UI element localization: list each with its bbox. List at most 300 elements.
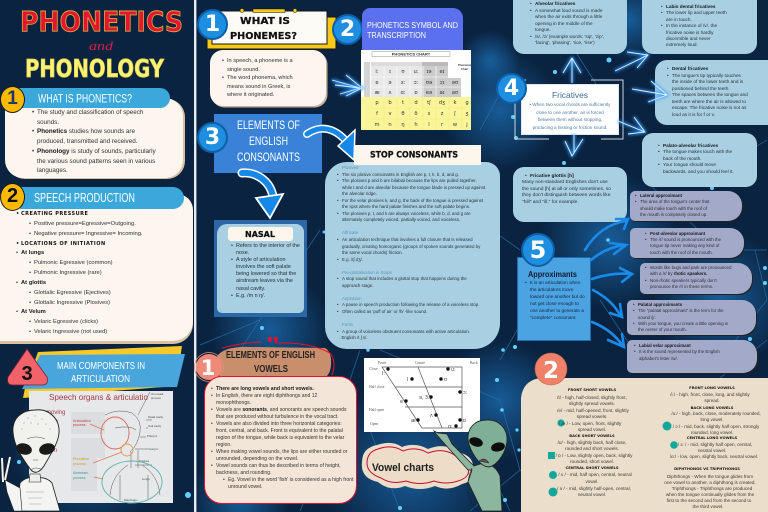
text: stop consonants details: the alveolar ridge. xyxy=(342,191,377,196)
icon: blue circle number 2: 2 xyxy=(340,17,355,42)
panel: elements of english vowels: VOWELS xyxy=(254,363,288,375)
panel: vowel types: CENTRAL SHORT VOWELS xyxy=(565,466,619,470)
heading banner: main components: MAIN COMPONENTS IN xyxy=(57,361,145,372)
heading: speech production: SPEECH PRODUCTION xyxy=(34,191,135,205)
panel: vowel types: spread vowels. xyxy=(577,414,607,419)
card: vowels explanation xyxy=(204,376,357,504)
image: speech organs diagram: Larynx xyxy=(150,447,159,451)
text: lateral approximant: Lateral approximant xyxy=(640,193,682,198)
chart: phonetics chart: e xyxy=(375,80,379,86)
chart: phonetics chart: ʊə xyxy=(426,80,432,86)
chart: phonetics chart: ɪə xyxy=(426,69,432,75)
text: approximants definition: It is an articulation when xyxy=(530,280,580,285)
chart: phonetics chart: ɔɪ xyxy=(440,80,444,86)
card: speech production body xyxy=(0,194,193,341)
text: lateral approximant: The area of the tongue's center that xyxy=(640,199,709,204)
chart: phonetics chart: h xyxy=(414,122,418,128)
chart: vowel quadrilateral: ə, 3: xyxy=(419,395,430,401)
text: stop consonants details: A pause in speech production following the release of a voiceless stop. xyxy=(342,302,479,307)
text: palatal approximant: sound /j/. xyxy=(638,315,656,320)
text: palatal approximant: The "palatal approximant" is the term for the xyxy=(638,308,724,313)
text: alveolar fricatives: when the air exits through a little xyxy=(535,14,602,19)
text: stop consonants details: An articulation technique that involves a full closure that is released xyxy=(342,237,473,242)
callout: vowel charts: Vowel charts xyxy=(372,462,434,474)
chart: vowel quadrilateral xyxy=(364,358,480,432)
chart: phonetics chart: r xyxy=(441,122,444,128)
text: stop consonants details: Fortis xyxy=(342,322,353,327)
image: speech organs diagram: Airstream xyxy=(73,471,88,475)
image: speech organs diagram: Diaphragm xyxy=(124,498,138,502)
chart: phonetics chart: θ xyxy=(401,111,405,117)
text: palato-alveolar fricatives: Your tongue should move xyxy=(663,162,716,167)
chart: phonetics chart: æ xyxy=(374,90,380,96)
icon: triangle badge number 3 xyxy=(8,349,47,385)
panel: vowel types: one vowel to another, a diphthong is created. xyxy=(664,480,756,485)
text: phoneme definition xyxy=(222,58,293,98)
text: vowel facts: that are produced without turbulence in the vocal tract. xyxy=(216,414,339,420)
text: dental fricatives: positioned behind the teeth. xyxy=(672,86,730,90)
image: speech organs diagram: Lungs xyxy=(142,477,150,481)
text: stop consonants details: Affricate xyxy=(342,230,358,235)
chart: vowel quadrilateral: Front xyxy=(378,361,387,365)
text: palatal approximant: Palatal approximants xyxy=(638,302,682,307)
text: palato-alveolar fricatives: back of the mouth. xyxy=(663,156,702,161)
text: lateral approximant: should make touch with the roof of xyxy=(640,206,707,211)
image: speech organs diagram: Phonation xyxy=(73,457,89,461)
text: post-alveolar approximant: touch with the roof of the mouth. xyxy=(650,250,713,255)
panel: approximants xyxy=(518,258,590,340)
card: nasal body xyxy=(217,224,304,313)
text: stop consonants details: A stop sound that includes a glottal stop that happens during the xyxy=(342,276,467,281)
text: palatal approximant: With your tongue, you create a little opening in xyxy=(638,321,728,326)
icon: triangle badge number 3: 3 xyxy=(21,363,33,385)
text: vowel facts: Vowels are also divided into three horizontal categories: xyxy=(216,421,342,427)
text: pressure and initiation list: CREATING PRESSURE xyxy=(21,211,88,217)
icon: blue circle number 5 xyxy=(521,233,555,267)
text: vowel facts: When making vowel sounds, the lips are either rounded or xyxy=(216,449,347,455)
panel: elements of english consonants: ENGLISH xyxy=(249,134,288,148)
text: phoneme definition: means sound in Greek, is xyxy=(227,84,290,90)
text: palato-alveolar fricatives: Palato-alveolar fricatives xyxy=(663,143,718,148)
image: speech organs diagram: Oro-nasal xyxy=(151,392,164,396)
panel: vowel types: slightly spread vowels. xyxy=(569,401,615,406)
text: nasal description: involves the soft palate xyxy=(236,264,291,270)
icon: blue circle number 5: 5 xyxy=(530,236,546,264)
panel: vowel types: /ʊ/ - high, slightly back, half close, xyxy=(558,440,626,445)
chart: phonetics chart: ə xyxy=(388,80,392,86)
chart: phonetics chart: k xyxy=(453,100,457,106)
chart: phonetics chart: ð xyxy=(414,111,418,117)
text: post-alveolar approximant xyxy=(645,231,721,255)
text: stop consonants details: E.g. /tʃ dʒ/. xyxy=(342,257,363,262)
text: stop consonants details: the same vocal chords) friction. xyxy=(342,250,403,255)
text: approximants definition: toward one another but do xyxy=(530,294,585,299)
text: vowel facts: Vowel sounds can thus be described in terms of height, xyxy=(216,463,341,469)
text: nasal description: nasal cavity. xyxy=(236,286,265,292)
text: phoneme definition: The word phonema, which xyxy=(227,75,293,81)
chart: phonetics chart: Phonemic xyxy=(458,63,471,67)
chart: phonetics chart: ʌ xyxy=(388,90,392,96)
heading banner: main components xyxy=(22,346,185,398)
icon: blue circle number 3: 3 xyxy=(205,125,220,150)
text: pressure and initiation list: At lungs xyxy=(21,250,44,256)
text: vowel facts: unrounded, depending on the vowel. xyxy=(216,456,298,462)
chart: phonetics chart: ɑː xyxy=(400,90,406,96)
panel: vowel types: / ʌ / - mid, half open, central, neutral xyxy=(558,472,632,477)
text: pressure and initiation list xyxy=(16,211,143,335)
text: fricatives definition xyxy=(530,102,610,130)
text: approximants definition: one another to generate a xyxy=(530,308,584,313)
chart: phonetics chart: s xyxy=(428,111,431,117)
card: stop consonants body xyxy=(325,162,500,349)
text: phonetics definitions: languages. xyxy=(37,167,68,174)
text: phoneme definition: In speech, a phoneme is a xyxy=(227,58,293,64)
heading: approximants: Approximants xyxy=(528,270,577,279)
text: vowel facts xyxy=(211,386,354,490)
text: phonetics definitions xyxy=(32,109,156,174)
text: alveolar fricatives: /s/, /z/ (example words: 'sip', 'zip', xyxy=(535,34,604,39)
icon: blue circle number 2 xyxy=(332,14,363,45)
text: phoneme definition: single sound. xyxy=(227,67,260,73)
text: dental fricatives: The spaces between the tongue and xyxy=(672,92,748,97)
text: rhotic speakers: with a /r/ by rhotic speakers. xyxy=(650,271,707,276)
panel: vowel types: Diphthongs - When the tongue glides from xyxy=(667,474,753,479)
chart: vowel quadrilateral: ɑ: xyxy=(448,425,453,430)
text: dental fricatives: the inside of the lower teeth and is xyxy=(672,79,743,84)
panel: vowel types: FRONT LONG VOWELS xyxy=(689,386,735,390)
image: speech organs diagram: Nasal cavity xyxy=(148,415,164,419)
text: phonetics definitions: Phonetics studies how sounds are xyxy=(37,128,135,135)
icon: badge number 1: 1 xyxy=(7,88,18,109)
text: stop consonants details: A group of voiceless obstruent consonants with active articulation. xyxy=(342,329,470,334)
heading banner: main components: ARTICULATION xyxy=(71,374,130,385)
panel: elements of english consonants: ELEMENTS OF xyxy=(237,118,300,132)
text: phonetics definitions: sounds. xyxy=(37,119,59,126)
panel: vowel types: / ɔː/ - mid, back, slightly half open, strongly xyxy=(673,424,760,429)
text: alveolar fricatives: A somewhat loud sound is made xyxy=(535,8,602,13)
panel: phonetics symbol heading: TRANSCRIPTION xyxy=(367,31,426,40)
panel: elements of english vowels: ELEMENTS OF ENGLISH xyxy=(226,349,315,361)
panel: speech production xyxy=(0,183,193,344)
chart: vowel quadrilateral: ʊ xyxy=(444,378,447,383)
text: vowel facts: region. xyxy=(216,442,232,448)
text: nasal description: Refers to the interior of the xyxy=(236,243,300,249)
text: nasal description: being lowered so that the xyxy=(236,271,296,277)
chart: phonetics chart: ʃ xyxy=(453,111,456,117)
chart: phonetics chart: p xyxy=(375,100,379,106)
chart: phonetics chart: aɪ xyxy=(439,90,445,96)
text: fricative glottis: "hill" and "ill," for example. xyxy=(522,200,579,205)
text: stop consonants details: gradually, creating homorganic (groups of spoken sounds generated by xyxy=(342,244,480,249)
chart: phonetics chart: n xyxy=(388,122,392,128)
text: labio dental fricatives: discernible and never xyxy=(666,36,711,41)
heading: what is phonetics: WHAT IS PHONETICS? xyxy=(38,94,132,106)
text: rhotic speakers: pronounce the /r/ in these terms. xyxy=(650,284,713,289)
text: phonetics definitions: Phonology is study of sounds, particularly xyxy=(37,148,156,155)
icon: coral badge number 2 xyxy=(535,353,567,385)
text: labio dental fricatives: Labio dental fricatives xyxy=(666,4,716,9)
heading: speech production xyxy=(20,187,184,209)
text: phonetics definitions: The study and classification of speech xyxy=(37,109,143,116)
text: pressure and initiation list: Pulmonic Egressive (common) xyxy=(34,260,113,266)
text: labio dental fricatives: fricative noise is hardly xyxy=(666,30,713,35)
image: speech organs diagram: ents xyxy=(46,427,57,433)
text: fricative glottis: Many non-standard Englishes don't use xyxy=(522,180,608,185)
text: stop consonants details: the spot where the hard palate finishes and the soft palate begins. xyxy=(342,204,470,209)
panel: vowel types: long vowel. xyxy=(701,417,723,422)
text: vowel facts: monophthongs. xyxy=(216,400,251,406)
text: vowel facts: front, central, and back. Front is equivalent to the palatal xyxy=(216,428,343,434)
text: approximants definition: "complete" consonant. xyxy=(530,315,577,320)
icon: blue circle number 3 xyxy=(197,122,228,153)
text: rhotic speakers: Non-rhotic speakers typically don't xyxy=(650,278,717,283)
text: alveolar fricatives: tongue. xyxy=(535,27,551,32)
heading: fricatives: Fricatives xyxy=(552,90,588,100)
text: post-alveolar approximant: The /r/ sound is pronounced with the xyxy=(650,237,721,242)
panel: phonetics symbol heading xyxy=(362,8,463,54)
text: vowel facts: Eg. Vowel in the word 'fish' is considered as a high front xyxy=(228,477,353,483)
image: speech organs diagram: Articulation xyxy=(73,419,91,423)
card: phoneme definition xyxy=(210,50,326,106)
text: alveolar fricatives: Alveolar fricatives xyxy=(535,1,575,6)
icon: coral badge number 2: 2 xyxy=(543,358,559,384)
text: pressure and initiation list: LOCATIONS OF INITIATION xyxy=(21,241,106,247)
image: speech organs diagram: process xyxy=(73,423,86,427)
chart: phonetics chart: f xyxy=(376,111,378,117)
chart: phonetics chart: b xyxy=(388,100,392,106)
chart: phonetics chart: uː xyxy=(413,69,419,75)
heading: what is phonemes: PHONEMES? xyxy=(230,31,297,42)
panel: vowel types: DIPHTHONGS VS TRIPHTHONGS xyxy=(674,467,740,471)
image: speech organs diagram xyxy=(29,391,173,503)
panel: alveolar fricatives xyxy=(513,0,627,54)
chart: phonetics chart: ɔː xyxy=(414,80,419,86)
panel: what is phonetics xyxy=(0,86,185,179)
panel: vowel types: /uː/ - high, back, close, moderately rounded, xyxy=(671,411,761,416)
image: speech organs diagram: Trachea xyxy=(139,459,150,463)
panel: main components in articulation xyxy=(0,346,185,512)
panel: vowel types: spread. xyxy=(704,398,720,403)
chart: vowel quadrilateral: ɔ: xyxy=(463,391,468,396)
text: dental fricatives: The tongue's tip typically touches xyxy=(672,72,741,78)
text: nasal description: nose. xyxy=(236,250,249,256)
title: and xyxy=(89,38,114,53)
text: nasal description: E.g. /m n ŋ/. xyxy=(236,293,265,299)
panel: vowel types: when the tongue continually glides from the xyxy=(666,492,755,497)
panel: vowel types: the third vowel. xyxy=(693,504,723,509)
panel: vowel types: /I/ - high, half-closed, slightly front, xyxy=(557,395,627,400)
panel: palatal approximant xyxy=(627,300,756,335)
chart: phonetics chart: PHONETICS CHART xyxy=(392,52,431,56)
text: approximants definition: not get close enough to xyxy=(530,301,579,306)
panel: vowel types: FRONT SHORT VOWELS xyxy=(568,388,616,392)
chart: phonetics chart: Chart xyxy=(461,67,468,71)
text: labio dental fricatives: are in touch. xyxy=(666,17,692,22)
text: rhotic speakers: Words like bugs and park are pronounced xyxy=(650,265,731,270)
panel: vowel types: CENTRAL LONG VOWELS xyxy=(687,436,738,440)
text: stop consonants details: Often called as 'puff of air' or /h/ -like sound. xyxy=(342,309,427,314)
chart: vowel quadrilateral: Half close xyxy=(369,385,385,389)
panel: vowel types: / ɒ / - Low, slightly open, back, slightly xyxy=(556,453,633,458)
text: labial velar approximant: It is the sound represented by the English xyxy=(639,349,720,354)
chart: phonetics chart: w xyxy=(453,122,458,128)
chart: phonetics chart: ʊ xyxy=(401,69,405,75)
image: speech organs diagram: rean xyxy=(46,419,58,425)
panel: lateral approximant xyxy=(630,191,742,221)
chart: vowel quadrilateral: Centre xyxy=(415,361,425,365)
panel: rhotic speakers xyxy=(640,263,752,294)
text: labio dental fricatives: extremely loud. xyxy=(666,42,698,47)
text: fricatives definition: between them without stopping, xyxy=(538,117,602,122)
text: alveolar fricatives: 'facing', 'phasing', 'rice, 'rise') xyxy=(535,40,595,45)
text: pressure and initiation list: Positive pressure=Egressive=Outgoing. xyxy=(34,221,136,227)
chart: phonetics chart: tʃ xyxy=(427,100,431,106)
panel: vowel types: BACK LONG VOWELS xyxy=(691,406,734,410)
text: phonetics definitions: produced, transmitted and received. xyxy=(37,138,137,145)
text: post-alveolar approximant: Post-alveolar approximant xyxy=(650,231,705,236)
icon: coral badge number 1 xyxy=(194,352,224,382)
panel: dental fricatives xyxy=(655,60,768,125)
heading: what is phonemes: WHAT IS xyxy=(240,16,290,27)
text: labial velar approximant: alphabet's letter /w/. xyxy=(639,356,678,361)
image: speech organs diagram: process xyxy=(73,476,86,480)
text: stop consonants details: while t and d are alveolar because the tongue blade is pressed up against xyxy=(342,185,485,190)
panel: fricative glottis xyxy=(513,167,627,222)
chart: phonetics chart: v xyxy=(388,111,392,117)
text: fricatives definition: • When two vocal chords are sufficiently xyxy=(530,102,610,107)
text: fricative glottis: they don't distinguish between words like xyxy=(522,193,610,198)
image: speech organs diagram: process xyxy=(151,396,161,400)
chart: vowel quadrilateral: Back xyxy=(470,361,478,365)
chart: vowel quadrilateral: Close xyxy=(369,367,378,371)
text: pressure and initiation list: Negative pressure= Ingressive= Incoming. xyxy=(34,231,143,237)
chart: phonetics chart: ʒ xyxy=(466,111,468,117)
text: fricatives definition: close to one another, air is forced xyxy=(536,110,604,115)
text: vowel facts: backness, and rounding. xyxy=(216,470,272,476)
text: dental fricatives: teeth are where the air is allowed to xyxy=(672,98,746,104)
panel: elements of english consonants xyxy=(214,114,322,173)
chart: phonetics chart: ɜː xyxy=(401,80,406,86)
text: nasal description xyxy=(231,243,300,299)
text: fricative glottis: the sound [h] at all or only sometimes, so xyxy=(522,187,611,192)
heading: stop consonants xyxy=(354,145,481,165)
text: labial velar approximant: Labial velar approximant xyxy=(639,343,691,348)
text: palatal approximant xyxy=(633,302,728,332)
panel: vowel types: / ɜː / - mid, slightly half open, central, xyxy=(678,442,752,447)
chart: vowel quadrilateral: ɒ xyxy=(463,419,466,424)
text: rhotic speakers xyxy=(645,265,732,289)
icon: blue circle number 1 xyxy=(197,9,228,40)
text: lateral approximant: the mouth is completely closed up. xyxy=(640,212,707,217)
heading: nasal: NASAL xyxy=(245,230,275,239)
chart: phonetics chart: t xyxy=(402,100,404,106)
text: labio dental fricatives xyxy=(661,4,727,47)
chart: vowel quadrilateral: u: xyxy=(451,368,456,373)
panel: post-alveolar approximant xyxy=(630,228,744,258)
text: pressure and initiation list: Velaric Egressive (clicks) xyxy=(34,319,98,325)
image: speech organs diagram: Speech organs & articulatio xyxy=(49,393,148,402)
chart: phonetics chart: ɪ xyxy=(389,69,391,75)
text: stop consonants details xyxy=(337,165,486,340)
icon: badge number 2 xyxy=(0,183,25,211)
panel: vowel types: neutral vowel. xyxy=(578,492,606,497)
text: alveolar fricatives: opening in the middle of the xyxy=(535,21,593,26)
text: palatal approximant: the center of your mouth. xyxy=(638,327,687,332)
chart: vowel quadrilateral: I: xyxy=(382,371,385,377)
chart: vowel quadrilateral: I xyxy=(407,377,408,383)
panel: labio dental fricatives xyxy=(642,0,757,54)
text: pressure and initiation list: At Velum xyxy=(21,309,46,315)
chart: vowel quadrilateral: e xyxy=(400,400,403,405)
text: vowel facts: Vowels are sonorants, and sonorants are speech sounds xyxy=(216,407,347,413)
text: pressure and initiation list: Glottalic Egressive (Ejectives) xyxy=(34,290,111,296)
image: speech organs diagram: process xyxy=(73,462,86,466)
text: stop consonants details: alternately completely voiced, partially voiced, and voiceless. xyxy=(342,217,460,222)
panel: vowel types: Triphthongs - Triphthongs are produced xyxy=(672,486,753,491)
chart: phonetics chart: ɒ xyxy=(414,90,418,96)
chart: phonetics chart: z xyxy=(441,111,444,117)
chart: phonetics chart: eə xyxy=(426,90,432,96)
chart: phonetics chart: m xyxy=(374,122,380,128)
text: pressure and initiation list: Pulmonic Ingressive (rare) xyxy=(34,270,102,276)
text: pressure and initiation list: Velaric Ingressive (not used) xyxy=(34,329,107,335)
panel: nasal xyxy=(214,220,307,317)
heading: what is phonemes xyxy=(206,8,336,50)
text: nasal description: airstream leaves via the xyxy=(236,278,293,284)
card: what is phonetics body xyxy=(5,98,183,178)
title xyxy=(20,5,183,83)
text: vowel facts: unround vowel. xyxy=(228,484,263,490)
panel: vowel types: BACK SHORT VOWELS xyxy=(569,434,615,438)
text: approximants definition: the articulators move xyxy=(530,287,574,292)
image: speech organs diagram: m xyxy=(52,448,57,454)
panel: vowel types: / æ / - Low, open, front, slightly xyxy=(559,421,622,426)
icon: badge number 1 xyxy=(0,86,25,113)
text: phonetics definitions: the various sound patterns seen in various xyxy=(37,158,155,165)
text: alveolar fricatives xyxy=(530,1,604,45)
image: speech organs diagram: Pharynx xyxy=(147,434,158,438)
text: stop consonants details: The six plosive consonants in English are p, t, k, b, d, and g. xyxy=(342,172,459,177)
text: labio dental fricatives: The lower lip and upper teeth xyxy=(666,10,727,15)
text: palato-alveolar fricatives xyxy=(658,143,734,174)
text: stop consonants details: Plosives xyxy=(342,165,358,170)
text: nasal description: A style of articulation xyxy=(236,257,285,263)
chart: phonetics chart: j xyxy=(465,122,468,128)
text: phoneme definition: where it originated. xyxy=(227,92,274,98)
text: stop consonants details: Aspiration xyxy=(342,296,362,301)
chart: phonetics chart: iː xyxy=(375,69,379,75)
panel: vowel types: spread vowel. xyxy=(578,427,606,432)
panel: palato-alveolar fricatives xyxy=(642,133,757,187)
text: approximants definition xyxy=(525,280,585,320)
text: stop consonants details: Pre-glottalisation in Stops xyxy=(342,270,392,275)
chart: phonetics chart: eɪ xyxy=(439,69,445,75)
text: dental fricatives: Dental fricatives xyxy=(672,66,708,71)
text: dental fricatives xyxy=(667,66,748,116)
chart: vowel quadrilateral: æ xyxy=(411,419,416,424)
chart: vowel quadrilateral: Half open xyxy=(369,408,384,412)
text: pressure and initiation list: Glottalic Ingressive (Plosives) xyxy=(34,300,110,306)
panel: vowel types: / ə / - mid, slightly half-open, central, xyxy=(557,486,631,491)
text: post-alveolar approximant: tongue tip never making any kind of xyxy=(650,243,719,248)
text: fricatives definition: producing a hissing or friction sound. xyxy=(533,125,607,130)
panel: vowel types: /iː/ - high, front, close, long, and slightly xyxy=(670,392,750,397)
text: vowel facts: There are long vowels and short vowels. xyxy=(216,386,314,392)
chart: phonetics chart xyxy=(361,50,471,130)
image: speech organs diagram: moving xyxy=(46,410,65,416)
icon: blue circle number 4: 4 xyxy=(504,76,519,101)
panel: elements of english consonants: CONSONANTS xyxy=(237,150,300,164)
